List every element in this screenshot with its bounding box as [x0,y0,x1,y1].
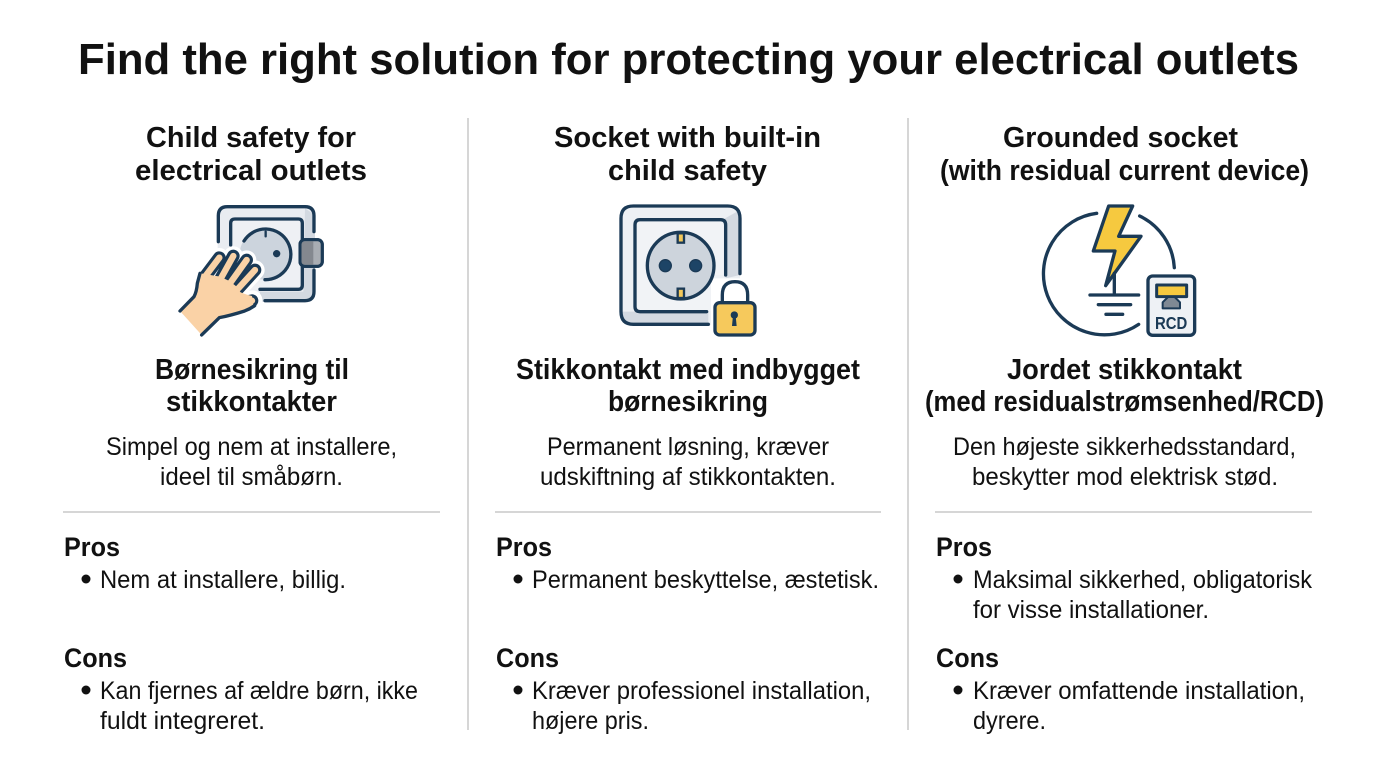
heading: Danish name: Børnesikring til [155,354,349,386]
cons: Cons [936,643,999,673]
description: Den højeste sikkerhedsstandard, [953,433,1296,461]
cons: Cons [64,643,127,673]
cons: Kræver omfattende installation, [973,677,1305,705]
pros [496,532,879,594]
description: udskiftning af stikkontakten. [540,463,836,491]
description: Permanent løsning, kræver [547,433,829,461]
heading: Danish name [516,354,860,418]
heading: English name: Socket with built-in [554,122,821,154]
pros: Permanent beskyttelse, æstetisk. [532,566,879,594]
heading: Danish name: Stikkontakt med indbygget [516,354,860,386]
heading: English name: (with residual current device) [940,155,1309,187]
heading: Danish name: stikkontakter [166,386,337,418]
cons [64,643,418,735]
description: beskytter mod elektrisk stød. [972,463,1278,491]
cons: højere pris. [532,707,649,735]
description [540,433,836,491]
pros: Maksimal sikkerhed, obligatorisk [973,566,1312,594]
description: Simpel og nem at installere, [106,433,397,461]
pros [64,532,346,594]
heading: English name [135,122,367,187]
pros [936,532,1312,624]
icon: lightning, ground symbol and RCD [1043,206,1195,335]
heading: English name [554,122,821,187]
description [106,433,397,491]
cons: Cons [496,643,559,673]
cons: Kan fjernes af ældre børn, ikke [100,677,418,705]
title: Find the right solution for protecting your electrical outlets [78,35,1299,84]
pros: Pros [496,532,552,562]
cons [496,643,871,735]
pros: Pros [64,532,120,562]
cons: dyrere. [973,707,1046,735]
heading: English name: Child safety for [146,122,356,154]
heading: English name: electrical outlets [135,155,367,187]
heading: English name [940,122,1309,187]
heading: English name: child safety [608,155,767,187]
icon: hand on socket with safety cover [180,206,322,335]
heading: Danish name: (med residualstrømsenhed/RCD) [925,386,1324,418]
heading: Danish name: børnesikring [608,386,768,418]
panel: child safety for electrical outlets [63,122,440,735]
pros: Nem at installere, billig. [100,566,346,594]
cons: fuldt integreret. [100,707,265,735]
heading: Danish name [155,354,349,418]
description [953,433,1296,491]
cons: Kræver professionel installation, [532,677,871,705]
pros: Pros [936,532,992,562]
heading: English name: Grounded socket [1003,122,1238,154]
heading: Danish name: Jordet stikkontakt [1007,354,1242,386]
panel: grounded socket with residual current device [925,122,1324,735]
cons [936,643,1305,735]
description: ideel til småbørn. [160,463,343,491]
panel: socket with built-in child safety [495,122,881,735]
pros: for visse installationer. [973,596,1209,624]
heading: Danish name [925,354,1324,418]
icon: socket with padlock [621,206,755,335]
icon: lightning, ground symbol and RCD: RCD [1155,313,1187,333]
